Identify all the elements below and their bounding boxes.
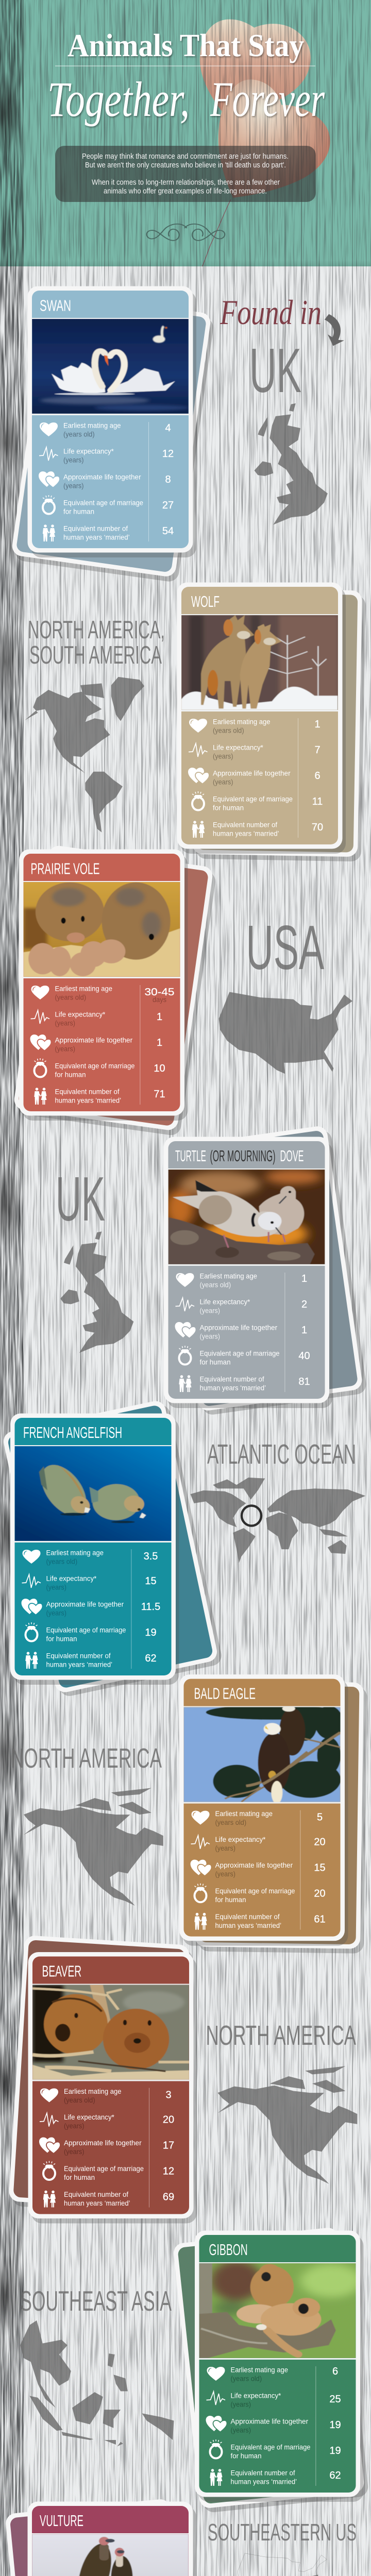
row: years married: 62 [145,1653,157,1664]
row: life expectancy: Life expectancy* [231,2392,281,2400]
title line 2 [47,72,325,127]
row: years married: human years ‘married’ [55,1096,121,1105]
row: marriage age [195,1884,326,1904]
photo: fish [14,1446,171,1541]
row: life expectancy [206,2392,341,2408]
photo: voles [24,882,180,977]
location: USA [219,912,352,1074]
row: life together: (years) [64,2147,85,2156]
location: North America (eagle): NORTH AMERICA [11,1743,162,1774]
row: marriage age: for human [63,507,94,515]
row: earliest mating age: (years old) [215,1818,246,1826]
row: marriage age: Equivalent age of marriage [55,1061,135,1070]
row: life together: (years) [200,1332,220,1341]
card title: DOVE [280,1147,304,1165]
row: life together: Approximate life together [200,1323,277,1331]
row: marriage age [179,1346,310,1366]
row: years married [179,1375,310,1392]
row: marriage age [34,1058,165,1079]
location: Atlantic Ocean [191,1439,365,1563]
front card [195,2231,364,2502]
row: earliest mating age: (years old) [64,2096,95,2104]
row: years married: 61 [314,1914,326,1925]
row: life expectancy [40,2113,174,2130]
row: life together: 11.5 [141,1601,160,1613]
row: life expectancy: 1 [157,1011,162,1023]
row: life together [39,471,171,489]
row: life together: 6 [314,770,321,782]
row: years married [192,820,323,838]
row: life together [188,768,321,786]
row: life together: (years) [63,481,83,489]
row: marriage age: for human [215,1895,246,1904]
title line 2: Together, [47,72,190,127]
row: earliest mating age [192,1809,323,1826]
row: life expectancy: 20 [314,1837,326,1848]
back card [10,291,215,583]
intro text box [55,146,316,202]
front card [28,286,196,557]
row: life expectancy: 7 [314,744,321,756]
row: earliest mating age: (years old) [63,430,95,438]
row: earliest mating age [40,2087,172,2104]
row: life expectancy: Life expectancy* [200,1297,250,1306]
row: years married [43,524,174,541]
photo: beavers [32,1985,189,2079]
front card [28,1952,197,2224]
row: marriage age: Equivalent age of marriage [63,499,143,507]
row: marriage age: 11 [312,796,323,807]
location: Southeast Asia: SOUTHEAST ASIA [20,2285,172,2317]
row: life expectancy: (years) [63,455,83,464]
row: earliest mating age: Earliest mating age [55,984,112,992]
row: life together: 8 [165,474,171,485]
row: marriage age: 27 [162,500,174,511]
row: life expectancy: 15 [145,1575,157,1587]
row: years married: human years ‘married’ [200,1384,266,1392]
back card [195,1680,367,1954]
row: earliest mating age [176,1272,307,1289]
row: life together [206,2416,341,2434]
row: life expectancy: Life expectancy* [63,447,114,455]
row: marriage age: Equivalent age of marriage [213,794,293,803]
row: life expectancy: (years) [231,2400,251,2408]
row: life expectancy: 20 [163,2114,174,2126]
row: life together: Approximate life together [213,769,291,777]
row: earliest mating age: Earliest mating age [215,1809,273,1818]
location: UK [249,335,328,525]
card title: WOLF [191,592,220,611]
row: marriage age: for human [55,1071,86,1079]
row: life expectancy: 2 [301,1299,307,1310]
row: earliest mating age: 30-45 [144,987,174,998]
row: years married: Equivalent number of [63,524,128,533]
row: marriage age: 12 [163,2166,174,2177]
row: life expectancy [189,743,321,760]
location: Americas: SOUTH AMERICA [29,641,162,669]
row: life together: (years) [231,2426,251,2434]
row: years married: 71 [154,1089,165,1100]
title line 2: Forever [210,72,325,127]
location: Americas: NORTH AMERICA, [28,616,165,644]
row: marriage age: for human [231,2451,262,2460]
row: years married: human years ‘married’ [213,829,279,838]
card title: BEAVER [42,1962,81,1980]
photo: eagles [183,1705,343,1804]
row: marriage age [43,2161,174,2181]
card title: FRENCH ANGELFISH [23,1423,122,1442]
card title: PRAIRIE VOLE [31,859,100,878]
row: earliest mating age: 1 [314,719,321,730]
row: life together: Approximate life together [46,1600,124,1608]
row: earliest mating age: Earliest mating age [213,717,271,725]
row: marriage age [210,2439,341,2460]
row: life together: (years) [213,778,233,786]
location: UK: UK [249,335,301,405]
location: UK second: UK [56,1164,105,1234]
card title: BALD EAGLE [194,1685,256,1703]
row: life together: Approximate life together [64,2139,142,2147]
row: years married: human years ‘married’ [215,1921,281,1929]
row: marriage age [26,1622,157,1642]
row: marriage age: for human [46,1634,77,1642]
row: life expectancy [39,447,174,464]
row: years married: 69 [163,2192,174,2203]
row: years married: 54 [162,526,174,537]
row: earliest mating age [31,984,174,1004]
row: years married [210,2469,341,2486]
row: life together [22,1599,160,1617]
row: earliest mating age [189,717,321,735]
row: earliest mating age: (years old) [213,726,244,735]
location: Southeastern US [208,2519,357,2576]
title [47,28,325,127]
row: years married: 70 [312,822,323,833]
row: earliest mating age: Earliest mating age [64,2087,122,2095]
row: life expectancy: 25 [329,2394,341,2405]
found in heading: Found in [220,293,322,332]
row: earliest mating age: 4 [165,422,171,434]
row: life expectancy: (years) [213,752,233,760]
row: earliest mating age [207,2366,338,2382]
row: years married: Equivalent number of [55,1087,120,1095]
row: life expectancy: Life expectancy* [64,2113,114,2121]
row: marriage age: Equivalent age of marriage [46,1626,126,1634]
row: years married: 81 [298,1376,310,1387]
panel: wolf card [177,582,366,861]
card title: SWAN [40,297,71,314]
row: marriage age: 19 [145,1627,157,1638]
row: marriage age: 40 [298,1350,310,1362]
row: earliest mating age: 6 [332,2366,338,2377]
back card [192,588,366,861]
row: life together: (years) [215,1870,235,1878]
front card [164,1137,333,1408]
row: life together: 17 [163,2140,174,2151]
row: years married: human years ‘married’ [64,2199,130,2207]
row: years married: Equivalent number of [231,2469,295,2477]
front card [28,2502,196,2576]
row: years married [194,1912,326,1930]
panel: gibbon card [173,2226,369,2514]
row: earliest mating age: Earliest mating age [200,1272,257,1280]
location: UK second [56,1164,133,1353]
row: years married: human years ‘married’ [46,1660,112,1668]
row: life expectancy: 12 [162,448,174,460]
row: years married [43,2190,174,2207]
back card [2,1398,223,1699]
row: years married: Equivalent number of [213,820,277,828]
row: earliest mating age: Earliest mating age [46,1549,104,1557]
card title: VULTURE [40,2512,83,2530]
row: earliest mating age: (years old) [231,2374,262,2382]
row: life expectancy: (years) [200,1307,220,1315]
row: earliest mating age: (years old) [200,1281,231,1289]
row: life together: (years) [55,1045,75,1053]
back card [162,1125,367,1416]
panel: beaver card [8,1935,197,2224]
row: years married [34,1087,165,1105]
row: years married: 62 [329,2470,341,2481]
row: marriage age [192,791,323,812]
row: life expectancy: Life expectancy* [55,1010,106,1018]
row: earliest mating age: Earliest mating age [63,421,121,430]
card title: (OR MOURNING) [210,1147,275,1165]
row: life expectancy: (years) [215,1844,235,1852]
row: life together: Approximate life together [55,1036,132,1044]
row: years married: Equivalent number of [215,1912,280,1921]
row: life together: Approximate life together [231,2417,308,2426]
row: life together: 1 [301,1325,307,1336]
ornament top [147,224,225,241]
panel: swan card [10,286,215,583]
row: life expectancy [191,1835,326,1852]
row: life expectancy [31,1010,162,1027]
row: life together: Approximate life together [215,1861,293,1869]
row: life together: 1 [157,1037,162,1048]
row: years married: human years ‘married’ [63,533,130,541]
row: marriage age: 20 [314,1888,326,1900]
row: years married: Equivalent number of [64,2190,128,2198]
row: marriage age [43,495,174,515]
row: marriage age: Equivalent age of marriage [231,2443,311,2451]
row: years married [25,1652,157,1669]
row: life expectancy: (years) [46,1583,66,1591]
row: life together: 15 [314,1862,326,1874]
row: life together [39,2137,174,2156]
back card [5,2498,199,2576]
panel: turtle dove card [162,1125,367,1416]
back card [12,844,217,1137]
row: life expectancy: (years) [64,2122,85,2130]
row: years married: human years ‘married’ [231,2477,297,2485]
row: life expectancy [175,1297,307,1315]
row: marriage age: Equivalent age of marriage [215,1887,295,1895]
row: life together: Approximate life together [63,473,141,481]
photo: vultures [32,2534,189,2576]
photo: wolves [181,615,338,710]
panel: bald eagle card [179,1674,367,1954]
row: life expectancy: Life expectancy* [46,1574,97,1583]
card title [175,1147,304,1165]
row: earliest mating age: (years old) [55,993,86,1002]
front card [177,582,346,854]
row: years married: Equivalent number of [200,1375,264,1383]
row: earliest mating age: (years old) [46,1557,77,1565]
card title: GIBBON [209,2241,248,2259]
row: years married: Equivalent number of [46,1652,111,1660]
front card [10,1414,179,1685]
card title: TURTLE [175,1147,206,1165]
front card [19,849,188,1121]
panel: french angelfish card [2,1398,223,1699]
row: earliest mating age: days [153,995,166,1004]
intro text box: People may think that romance and commitment are just for humans. [82,152,289,161]
row: life together [175,1322,307,1341]
row: marriage age: Equivalent age of marriage [200,1349,280,1357]
row: earliest mating age: 3 [165,2090,172,2101]
row: life together: 19 [329,2419,341,2431]
row: marriage age: 10 [154,1063,165,1074]
location: Americas [25,616,165,833]
row: life expectancy: Life expectancy* [213,743,263,751]
row: marriage age: for human [200,1358,231,1366]
row: life together [30,1035,162,1053]
photo: swans [32,319,189,414]
row: earliest mating age [23,1549,158,1565]
row: life together [191,1860,326,1878]
row: marriage age: Equivalent age of marriage [64,2164,144,2173]
row: earliest mating age: 5 [317,1812,323,1823]
title line 1: Animals That Stay [68,28,304,63]
photo: gibbons [199,2261,362,2358]
location: North America (beaver) [206,2020,357,2184]
front card [179,1674,348,1946]
row: earliest mating age: 3.5 [144,1551,158,1562]
panel: prairie vole card [12,844,217,1137]
row: marriage age: 19 [329,2445,341,2456]
back card [173,2226,369,2514]
location: North America (eagle) [11,1743,163,1906]
row: life expectancy: (years) [55,1019,75,1027]
row: life together: (years) [46,1608,66,1617]
intro text box: But we aren't the only creatures who believe in 'till death us do part'. [85,161,286,170]
row: earliest mating age: Earliest mating age [231,2366,288,2374]
row: earliest mating age [40,421,171,438]
row: earliest mating age: 1 [301,1273,307,1284]
row: marriage age: for human [64,2173,95,2181]
row: marriage age: for human [213,804,244,812]
arrow: curved to UK [325,314,344,346]
back card [8,1935,193,2216]
row: life expectancy [22,1574,157,1591]
intro text box: When it comes to long-term relationships, there are a few other [92,178,280,187]
photo: doves [165,1170,325,1264]
row: life expectancy: Life expectancy* [215,1835,266,1843]
panel: vulture card [5,2498,199,2576]
balloon hearts [200,19,330,266]
location: Southeast Asia [20,2285,174,2447]
intro text box: animals who offer great examples of life-long romance. [104,188,267,196]
